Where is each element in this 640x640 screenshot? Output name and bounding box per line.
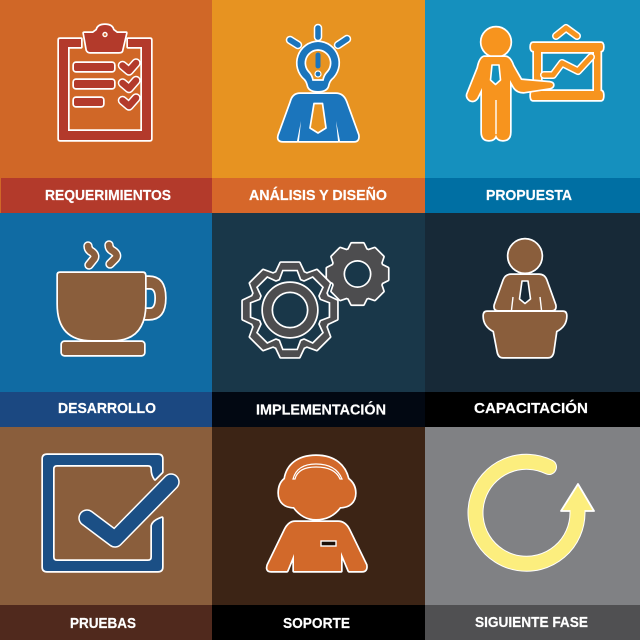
label: siguiente fase: SIGUIENTE FASE bbox=[475, 614, 588, 631]
icon: coffee cup bbox=[58, 245, 165, 355]
panel: requerimientos bbox=[0, 0, 212, 213]
icon: presenter with chart board bbox=[467, 28, 603, 140]
label: requerimientos: REQUERIMIENTOS bbox=[45, 187, 171, 204]
label: propuesta: PROPUESTA bbox=[486, 187, 572, 204]
label: pruebas: PRUEBAS bbox=[70, 615, 136, 632]
icon: support agent with headset bbox=[267, 456, 366, 571]
icon: person with light bulb head bbox=[278, 28, 358, 141]
icon: clipboard checklist bbox=[59, 25, 151, 140]
label: implementacion: IMPLEMENTACIÓN bbox=[256, 400, 386, 418]
icon: circular arrow bbox=[476, 462, 594, 564]
panel: propuesta bbox=[425, 0, 640, 213]
label: desarrollo: DESARROLLO bbox=[58, 400, 156, 417]
panel: soporte bbox=[212, 427, 425, 640]
panel: siguiente fase bbox=[425, 427, 640, 640]
panel: implementacion bbox=[212, 213, 425, 427]
label: soporte: SOPORTE bbox=[283, 615, 350, 632]
label: capacitacion: CAPACITACIÓN bbox=[474, 399, 588, 417]
icon: two gears bbox=[243, 244, 388, 357]
panel: capacitacion bbox=[425, 213, 640, 427]
icon: check box bbox=[43, 455, 171, 571]
icon: speaker at podium bbox=[484, 240, 566, 357]
panel: pruebas bbox=[0, 427, 212, 640]
panel: desarrollo bbox=[0, 213, 212, 427]
label: analisis y diseno: ANÁLISIS Y DISEÑO bbox=[249, 186, 387, 204]
panel: analisis y diseno bbox=[212, 0, 425, 213]
